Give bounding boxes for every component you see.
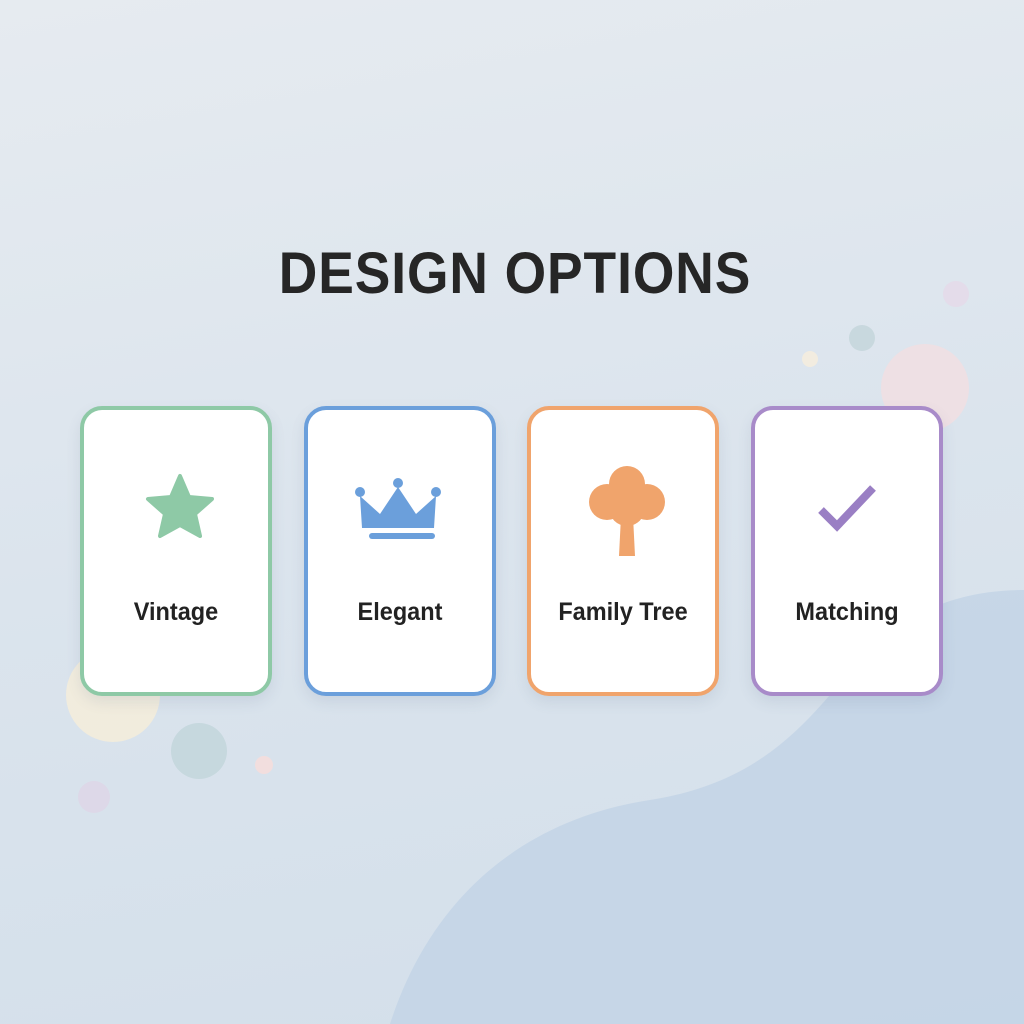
icon: crown xyxy=(355,478,441,539)
title: DESIGN OPTIONS xyxy=(279,241,751,306)
label: Elegant xyxy=(358,598,442,626)
label: Matching xyxy=(795,598,899,626)
panel: Vintage xyxy=(80,406,272,696)
panel: Family Tree xyxy=(527,406,719,696)
panel: Elegant xyxy=(304,406,496,696)
label: Family Tree xyxy=(558,598,688,626)
icon: checkmark xyxy=(818,485,876,532)
icon: tree xyxy=(589,466,665,556)
icon: star xyxy=(146,474,214,538)
label: Vintage xyxy=(134,598,218,626)
panel: Matching xyxy=(751,406,943,696)
